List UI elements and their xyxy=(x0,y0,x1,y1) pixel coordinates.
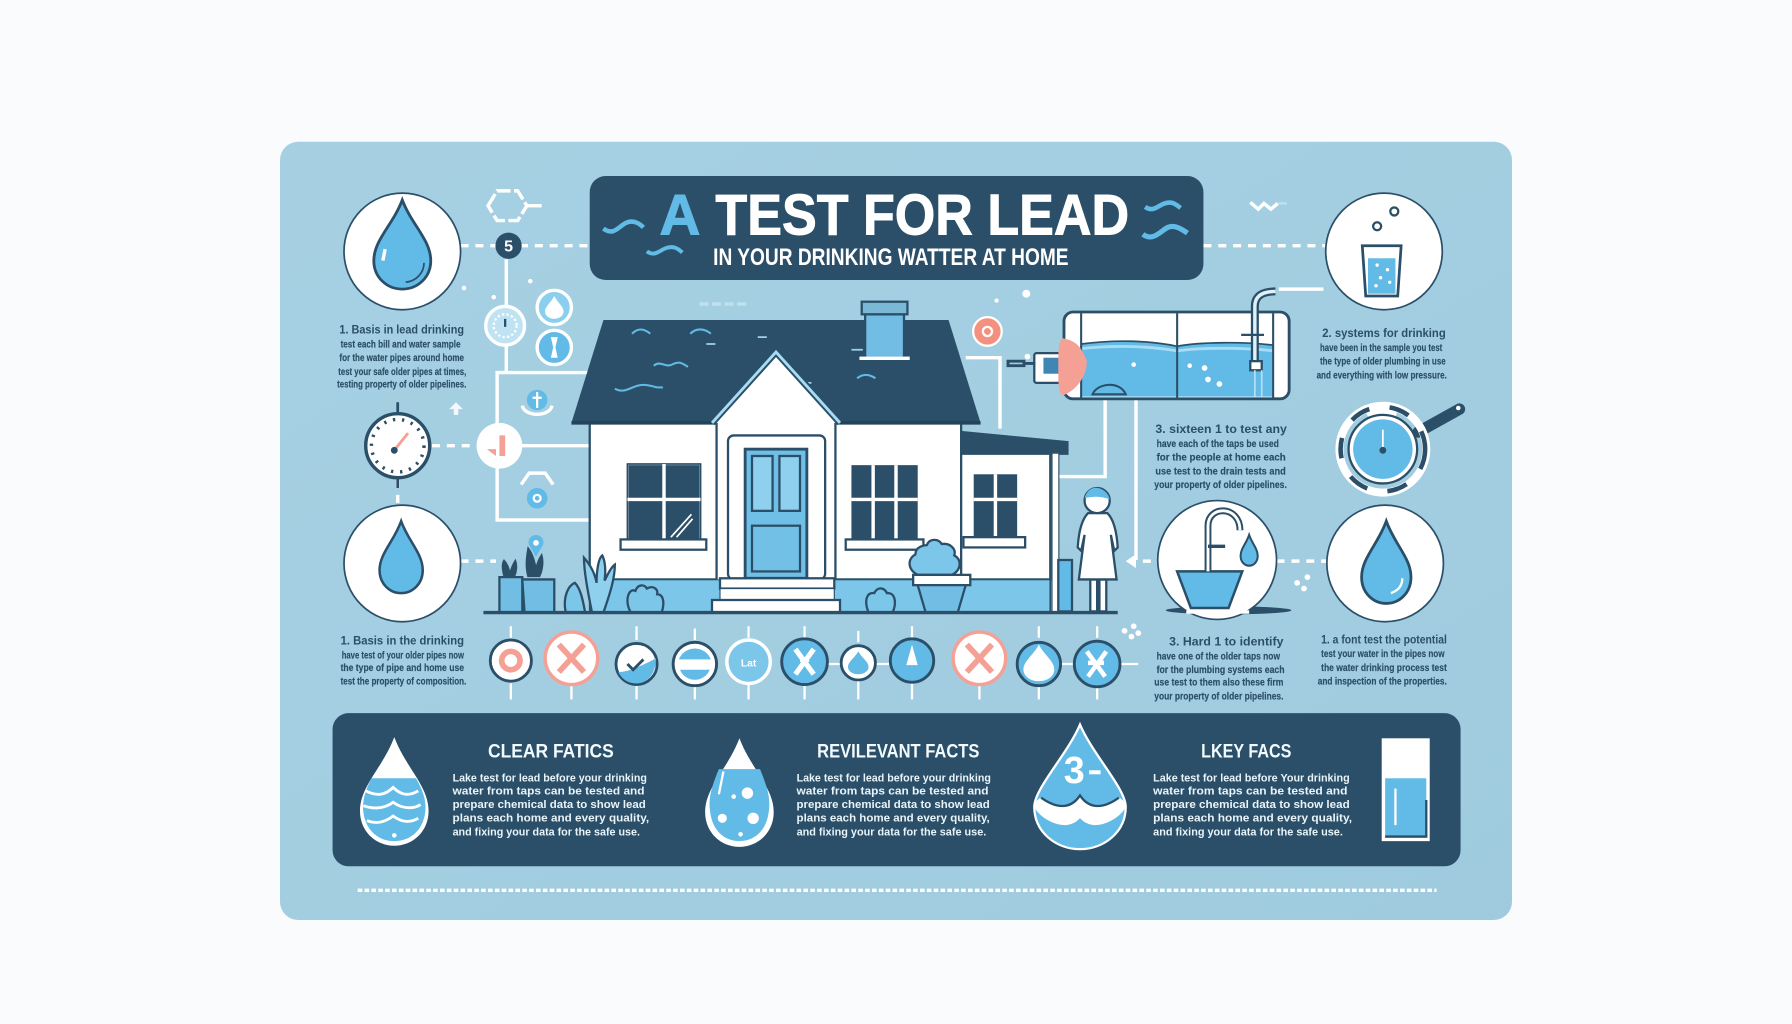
text block: top-right step: and everything with low pressure. xyxy=(1317,370,1447,381)
fact: key facts: Lake test for lead before Your drinking xyxy=(1153,773,1350,785)
connector lines xyxy=(398,246,1329,568)
text block: lower-left step: test the property of composition. xyxy=(341,677,466,688)
icon: gauge left xyxy=(366,402,430,488)
ground line xyxy=(483,611,1118,614)
marker 2: cross xyxy=(545,632,598,685)
marker 5: label xyxy=(727,640,770,683)
text block: middle-right step: your property of older pipelines. xyxy=(1154,480,1287,491)
house side extension xyxy=(961,431,1072,611)
text block: lower-middle step: 3. Hard 1 to identify xyxy=(1169,635,1284,649)
title banner: TEST FOR LEAD xyxy=(715,183,1129,247)
icon: speck drop xyxy=(705,738,774,847)
marker 4: split xyxy=(673,642,717,686)
fact: key facts xyxy=(1152,741,1352,838)
text block: top-left step: 1. Basis in lead drinking xyxy=(339,323,464,337)
icon: glass circle top-right xyxy=(1326,193,1442,310)
text block: top-left step: test your safe older pipes at times, xyxy=(338,367,466,378)
text block: lower-right step: the water drinking process test xyxy=(1321,663,1447,674)
fact: relevant facts: water from taps can be tested and xyxy=(796,785,989,797)
icon cluster: small network icons xyxy=(449,191,1310,639)
door xyxy=(728,435,825,579)
text block: middle-right step: use test to the drain tests and xyxy=(1155,466,1286,477)
text block: lower-right step: and inspection of the properties. xyxy=(1318,677,1447,688)
text block: lower-right step xyxy=(1318,632,1447,688)
tank faucet pipe xyxy=(1241,291,1275,397)
fact: relevant facts xyxy=(796,741,991,838)
text block: lower-middle step: for the plumbing systems each xyxy=(1157,665,1285,676)
icon: drop circle top-left xyxy=(344,193,461,310)
fact: relevant facts: and fixing your data for the safe use. xyxy=(797,826,986,838)
illustration: water tank xyxy=(1008,291,1289,399)
plants and pots xyxy=(499,540,970,613)
text block: lower-middle step: have one of the older taps now xyxy=(1157,651,1280,662)
text block: top-left step: test each bill and water sample xyxy=(341,339,461,350)
window right xyxy=(963,474,1025,547)
fact: clear facts: Lake test for lead before your drinking xyxy=(453,773,647,785)
text block: middle-right step xyxy=(1154,422,1287,491)
fact: relevant facts: Lake test for lead before your drinking xyxy=(797,773,991,785)
icon: numbered drop xyxy=(1034,725,1126,849)
text block: lower-right step: 1. a font test the potential xyxy=(1321,632,1447,646)
fact: clear facts: water from taps can be tested and xyxy=(452,785,645,797)
text block: lower-middle step xyxy=(1154,635,1285,702)
marker 6: ribbon xyxy=(782,639,827,685)
illustration: house xyxy=(483,302,1118,613)
text block: top-left step: for the water pipes around home xyxy=(339,353,464,364)
icon: drop circle bottom-right xyxy=(1327,505,1443,622)
fact: key facts: prepare chemical data to show lead xyxy=(1153,799,1350,811)
text block: top-right step: have been in the sample you test xyxy=(1320,343,1443,354)
marker 9: cross xyxy=(953,632,1006,685)
fact: key facts: water from taps can be tested and xyxy=(1152,785,1347,797)
chimney xyxy=(859,302,910,360)
text block: lower-right step: test your water in the pipes now xyxy=(1321,649,1445,660)
fact: clear facts: prepare chemical data to show lead xyxy=(453,799,646,811)
foundation band xyxy=(590,579,1050,613)
fact: clear facts xyxy=(452,741,649,838)
fact: key facts: plans each home and every quality, xyxy=(1153,813,1352,825)
gable xyxy=(712,352,840,579)
text block: middle-right step: 3. sixteen 1 to test any xyxy=(1155,422,1287,436)
dotted divider xyxy=(358,889,1437,892)
title banner xyxy=(590,176,1203,280)
panel: main background xyxy=(280,142,1512,920)
icon: faucet and basin circle xyxy=(1158,501,1291,619)
marker 7: drop xyxy=(841,646,875,680)
fact: relevant facts: REVILEVANT FACTS xyxy=(817,741,979,763)
marker 3: check xyxy=(616,643,657,685)
icon: numbered drop: 3 xyxy=(1064,749,1085,791)
marker 11: ribbon xyxy=(1074,641,1120,687)
steps xyxy=(712,578,840,613)
text block: top-left step: testing property of older pipelines. xyxy=(337,379,466,390)
roof xyxy=(571,320,981,423)
fact: key facts: LKEY FACS xyxy=(1201,741,1291,763)
fact: relevant facts: plans each home and every quality, xyxy=(797,813,990,825)
window middle xyxy=(846,465,923,550)
icon row: status markers xyxy=(490,626,1138,699)
marker 10: white drop xyxy=(1017,642,1061,686)
text block: middle-right step: have each of the taps be used xyxy=(1157,439,1279,450)
icon: timer right xyxy=(1339,405,1461,493)
icon cluster: small network icons: 5 xyxy=(504,238,513,255)
marker 8: blue drop xyxy=(890,639,934,682)
text block: top-right step: the type of older plumbing in use xyxy=(1320,357,1446,368)
text block: lower-left step: have test of your older pipes now xyxy=(342,650,464,661)
marker 5: label: Lat xyxy=(741,658,757,669)
subtitle: IN YOUR DRINKING WATTER AT HOME xyxy=(713,244,1069,271)
fact: relevant facts: prepare chemical data to show lead xyxy=(797,799,990,811)
fact: clear facts: and fixing your data for the safe use. xyxy=(453,826,640,838)
text block: lower-middle step: your property of older pipelines. xyxy=(1154,691,1284,702)
person xyxy=(1078,488,1118,611)
panel: facts strip xyxy=(333,713,1461,866)
text block: lower-left step: the type of pipe and home use xyxy=(341,663,464,674)
text block: middle-right step: for the people at home each xyxy=(1157,453,1286,464)
fact: clear facts: CLEAR FATICS xyxy=(488,741,614,763)
title text: A xyxy=(659,183,701,247)
text block: lower-left step xyxy=(341,634,466,688)
fact: clear facts: plans each home and every quality, xyxy=(453,813,649,825)
marker 1: ring xyxy=(490,640,531,681)
icon: wave drop xyxy=(360,737,429,846)
text block: lower-middle step: use test to them also these firm xyxy=(1154,678,1283,689)
window left xyxy=(621,464,706,550)
icon: water level glass xyxy=(1382,738,1430,841)
text block: top-right step xyxy=(1317,326,1447,381)
house walls xyxy=(590,421,961,579)
fact: key facts: and fixing your data for the safe use. xyxy=(1153,826,1343,838)
text block: top-right step: 2. systems for drinking xyxy=(1322,326,1446,340)
text block: lower-left step: 1. Basis in the drinking xyxy=(341,634,464,648)
text block: top-left step xyxy=(337,323,466,390)
icon: drop circle bottom-left xyxy=(344,505,461,622)
